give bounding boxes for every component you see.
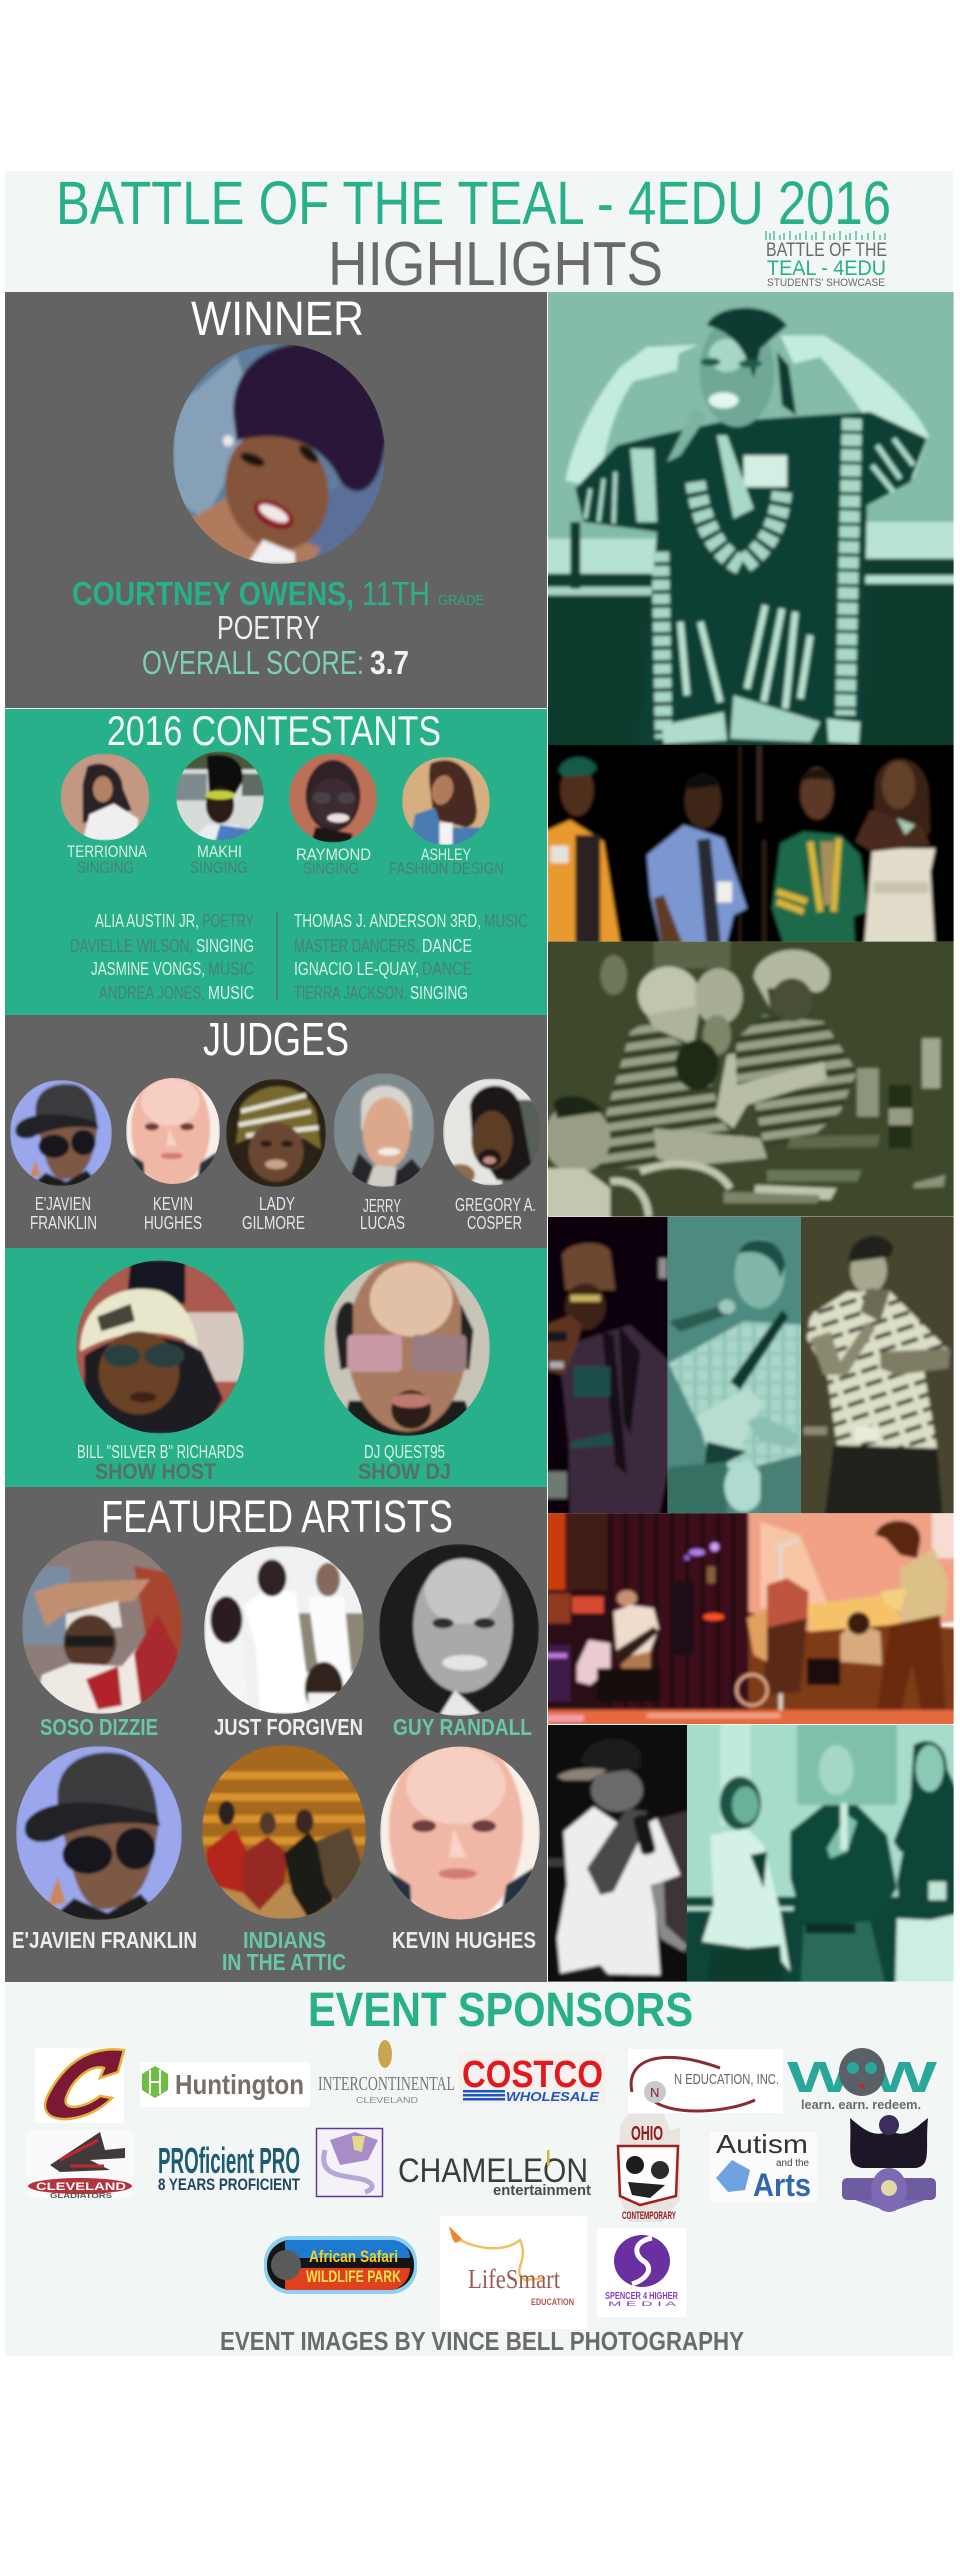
logo: N Education: N: [650, 2085, 659, 2100]
logo: WOW: W W: [787, 2053, 938, 2102]
logo: Costco: COSTCO: [462, 2054, 603, 2096]
contestant names: SINGING: [303, 859, 359, 878]
winner score: 3.7: [370, 644, 409, 681]
winner name: GRADE: [438, 592, 484, 609]
artist labels row 1: [40, 1714, 532, 1740]
photo: singer with dreadlocks: [548, 1217, 668, 1514]
photo: band on stage: [548, 1513, 954, 1724]
portrait: Raymond: [289, 754, 377, 842]
winner category: POETRY: [217, 609, 320, 646]
event logo: TEAL - 4EDU: [767, 257, 886, 280]
logo: Autism and the Arts: Autism: [716, 2129, 808, 2159]
contestant list right: THOMAS J. ANDERSON 3RD,: [294, 911, 481, 931]
logo: N Education: N EDUCATION, INC.: [674, 2071, 779, 2088]
logo: InterContinental: CLEVELAND: [356, 2096, 418, 2105]
logo: N Education: [628, 2049, 783, 2113]
logo: Huntington: [140, 2062, 310, 2107]
logo: LifeSmart: LifeSmart: [468, 2264, 560, 2294]
winner name: 11TH: [362, 575, 430, 612]
event logo: [766, 231, 887, 289]
photo: young rapper: [548, 1725, 687, 1982]
contestant list left: [70, 911, 254, 1003]
contestant list right: MASTER DANCERS,: [294, 936, 419, 956]
logo: African Safari: WILDLIFE PARK: [306, 2267, 402, 2286]
portrait: Just Forgiven: [204, 1546, 364, 1716]
logo: Autism and the Arts: Arts: [753, 2167, 811, 2203]
contestant names: ASHLEY: [421, 845, 471, 864]
contestant names: SINGING: [77, 858, 134, 877]
subtitle: HIGHLIGHTS: [328, 230, 663, 299]
host labels: BILL "SILVER B" RICHARDS: [77, 1442, 244, 1462]
contestant names: TERRIONNA: [67, 842, 148, 861]
judge names: GILMORE: [242, 1213, 305, 1233]
photo: contestants on stage: [548, 745, 954, 942]
artist labels row 2: IN THE ATTIC: [222, 1949, 346, 1975]
contestant names: SINGING: [190, 858, 248, 877]
logo: PROficient PRO: 8 YEARS PROFICIENT: [158, 2175, 300, 2194]
artist labels row 2: INDIANS: [243, 1927, 326, 1953]
contestant list left: DAVIELLE WILSON,: [70, 936, 193, 956]
portrait: Ashley: [402, 757, 490, 845]
contestant list right: DANCE: [422, 936, 472, 956]
featured artists heading: FEATURED ARTISTS: [101, 1491, 453, 1542]
logo: WOW: learn. earn. redeem.: [801, 2097, 921, 2112]
contestant names: FASHION DESIGN: [389, 859, 504, 878]
logo: LifeSmart: EDUCATION: [531, 2297, 574, 2307]
logo: Cleveland Gladiators: GLADIATORS: [50, 2193, 112, 2200]
contestant list left: ALIA AUSTIN JR,: [95, 911, 199, 931]
panel: featured artists: [5, 1487, 547, 1982]
logo: WOW: [787, 2048, 938, 2112]
logo: Chameleon: entertainment: [493, 2182, 591, 2199]
logo: InterContinental: [318, 2040, 455, 2105]
logo: Spencer 4 Higher: M E D I A: [608, 2302, 676, 2308]
logo: Huntington: Huntington: [175, 2069, 304, 2100]
host labels: DJ QUEST95: [364, 1442, 445, 1462]
portrait: Indians in the Attic: [202, 1745, 366, 1919]
contestant names: MAKHI: [197, 842, 242, 861]
logo: PROficient PRO: [158, 2140, 300, 2194]
event logo: STUDENTS' SHOWCASE: [767, 277, 885, 289]
panel: judges: [5, 1013, 547, 1248]
judge names: FRANKLIN: [30, 1213, 97, 1233]
logo: Spencer 4 Higher: SPENCER 4 HIGHER: [605, 2291, 679, 2302]
portrait: Soso Dizzie: [22, 1540, 182, 1714]
portrait: Jerry Lucas: [334, 1073, 434, 1187]
winner score: OVERALL SCORE:: [142, 644, 364, 681]
portrait: Lady Gilmore: [226, 1079, 326, 1187]
artist labels row 2: [12, 1927, 536, 1975]
logo: Ohio comedy: OHIO: [631, 2123, 663, 2145]
winner name: COURTNEY OWENS,: [72, 575, 354, 612]
logo: Cleveland Gladiators: CLEVELAND: [36, 2181, 126, 2193]
portrait: Silver B: [76, 1260, 244, 1434]
judge names: [30, 1194, 536, 1233]
winner heading: WINNER: [191, 293, 364, 346]
contestant list left: JASMINE VONGS,: [91, 959, 205, 979]
logo: African Safari: [264, 2236, 417, 2294]
contestant list right: [294, 911, 528, 1003]
logo: Ohio comedy: [618, 2114, 680, 2222]
contestant list right: SINGING: [410, 983, 468, 1003]
contestant list right: DANCE: [422, 959, 472, 979]
contestant names: RAYMOND: [296, 845, 371, 864]
judge names: COSPER: [467, 1213, 522, 1233]
logo: African Safari: African Safari: [309, 2247, 398, 2266]
contestant list right: TIERRA JACKSON,: [294, 983, 407, 1003]
panel: winner: [5, 292, 547, 708]
portrait: Kevin large: [380, 1734, 540, 1924]
portrait: Kevin: [126, 1070, 220, 1187]
host labels: SHOW HOST: [95, 1459, 216, 1484]
sponsors heading: EVENT SPONSORS: [308, 1984, 693, 2037]
logo: Cleveland Gladiators: [27, 2130, 133, 2200]
photo: adult performers in mint: [687, 1725, 954, 1982]
logo: Queen crest: [842, 2115, 936, 2212]
logo: Art circle: [316, 2128, 382, 2196]
artist labels row 2: KEVIN HUGHES: [392, 1927, 536, 1953]
judge names: LADY: [259, 1194, 295, 1214]
portrait: Guy Randall: [379, 1544, 539, 1716]
logo: LifeSmart: [440, 2216, 587, 2329]
winner portrait: [173, 344, 385, 564]
portrait: E'Javien: [10, 1080, 112, 1186]
panel: hosts: [5, 1248, 547, 1487]
contestant list left: MUSIC: [208, 983, 254, 1003]
artist labels row 1: GUY RANDALL: [393, 1714, 532, 1740]
artist labels row 1: JUST FORGIVEN: [214, 1714, 363, 1740]
panel: contestants: [5, 707, 547, 1015]
panel: sponsors: [5, 1982, 953, 2356]
photo: rapper in olive: [801, 1217, 954, 1514]
logo: Ohio comedy: CONTEMPORARY: [622, 2210, 676, 2222]
portrait: E'Javien large: [16, 1746, 182, 1920]
portrait: Makhi: [176, 752, 264, 840]
logo: Autism and the Arts: [710, 2129, 817, 2203]
contestant list left: SINGING: [196, 936, 254, 956]
logo: PROficient PRO: PROficient PRO: [158, 2140, 300, 2181]
judge names: LUCAS: [360, 1213, 405, 1233]
logo: InterContinental: INTERCONTINENTAL: [318, 2073, 455, 2095]
logo: Costco: WHOLESALE: [506, 2089, 599, 2104]
artist labels row 1: SOSO DIZZIE: [40, 1714, 158, 1740]
contestant list left: ANDREA JONES,: [99, 983, 205, 1003]
contestant list left: MUSIC: [208, 959, 254, 979]
contestant list left: POETRY: [202, 911, 254, 931]
judge names: KEVIN: [153, 1194, 193, 1214]
portrait: DJ Quest95: [324, 1256, 490, 1436]
portrait: Terrionna: [60, 754, 150, 840]
logo: Cavaliers: [35, 2048, 124, 2123]
contestant list right: MUSIC: [484, 911, 528, 931]
logo: Chameleon: CHAMELEON: [398, 2152, 588, 2190]
logo: Autism and the Arts: and the: [776, 2158, 809, 2169]
host labels: [77, 1442, 451, 1484]
portrait: Gregory Cosper: [443, 1078, 541, 1186]
artist labels row 2: E'JAVIEN FRANKLIN: [12, 1927, 197, 1953]
judge names: HUGHES: [144, 1213, 202, 1233]
judge names: E'JAVIEN: [35, 1194, 91, 1214]
header panel: [5, 169, 953, 299]
logo: Spencer 4 Higher: [597, 2228, 686, 2317]
judge names: GREGORY A.: [455, 1195, 536, 1215]
photo: judges at table: [548, 942, 954, 1217]
event logo: BATTLE OF THE: [766, 240, 887, 261]
photo: winner performing: [537, 282, 960, 760]
footer credit: EVENT IMAGES BY VINCE BELL PHOTOGRAPHY: [220, 2326, 744, 2356]
judges heading: JUDGES: [203, 1013, 349, 1065]
contestants heading: 2016 CONTESTANTS: [107, 707, 441, 754]
contestant names: [67, 842, 504, 878]
contestant list right: IGNACIO LE-QUAY,: [294, 959, 419, 979]
photo: guitarist in teal: [668, 1217, 801, 1514]
judge names: JERRY: [363, 1196, 401, 1216]
host labels: SHOW DJ: [358, 1459, 451, 1484]
